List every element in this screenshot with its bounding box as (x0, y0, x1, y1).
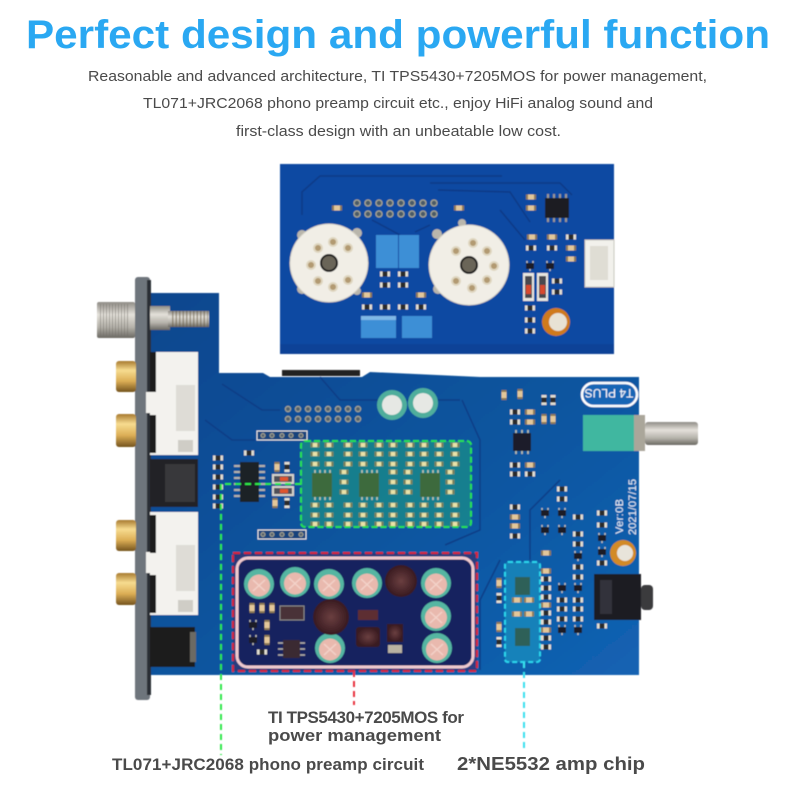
intro paragraph: TL071+JRC2068 phono preamp circuit etc., enjoy HiFi analog sound and (143, 96, 653, 112)
phono preamp area (301, 441, 471, 527)
tube socket right (429, 219, 509, 305)
white connector (585, 240, 614, 287)
version text: Ver:0B (614, 499, 626, 534)
tube socket left (290, 224, 368, 302)
label: power management: power management (268, 726, 441, 745)
power management area (233, 553, 477, 671)
T4 PLUS badge (582, 383, 637, 406)
blue trim pots (361, 235, 432, 338)
SOIC chip (234, 462, 265, 502)
orange capacitor (610, 540, 636, 566)
upper capacitors (377, 388, 438, 420)
power jack (150, 627, 196, 667)
green leader line (221, 484, 301, 755)
intro paragraph (88, 69, 707, 140)
power parts (249, 603, 402, 658)
label: power management (268, 708, 464, 745)
label: phono preamp: TL071+JRC2068 phono preamp circuit (112, 755, 424, 774)
op amp chip (545, 194, 569, 222)
cyan leader line (523, 662, 525, 750)
intro paragraph: first-class design with an unbeatable low cost. (236, 124, 561, 140)
electrolytic capacitor (542, 308, 570, 336)
side diodes (272, 474, 294, 496)
capacitors (244, 567, 452, 663)
panel: tube socket board (280, 164, 614, 354)
inductors (313, 565, 417, 647)
title: Perfect design and powerful function (26, 13, 770, 57)
black input jack (150, 459, 198, 507)
U chip (513, 430, 531, 454)
headphone jack (594, 574, 653, 620)
panel: main board (97, 277, 698, 755)
white RCA sockets (146, 352, 198, 615)
pin header (354, 200, 437, 217)
diodes (523, 273, 548, 301)
version text (614, 479, 639, 535)
front panel (135, 277, 151, 700)
grounding screw (97, 302, 209, 338)
amp chip area (505, 562, 540, 662)
RCA jacks (116, 361, 136, 605)
version text: 2021/07/15 (627, 479, 639, 535)
side resistors (213, 450, 290, 508)
potentiometer (583, 415, 698, 451)
pin headers and dual rows (257, 406, 361, 539)
intro paragraph: Reasonable and advanced architecture, TI TPS5430+7205MOS for power management, (88, 69, 707, 85)
small resistors (332, 194, 576, 334)
right components (496, 389, 607, 650)
label: amp chip: 2*NE5532 amp chip (457, 754, 645, 774)
label: power management: TI TPS5430+7205MOS for (268, 708, 464, 727)
T4 PLUS badge: T4 PLUS (585, 386, 633, 400)
red leader line (353, 671, 355, 705)
